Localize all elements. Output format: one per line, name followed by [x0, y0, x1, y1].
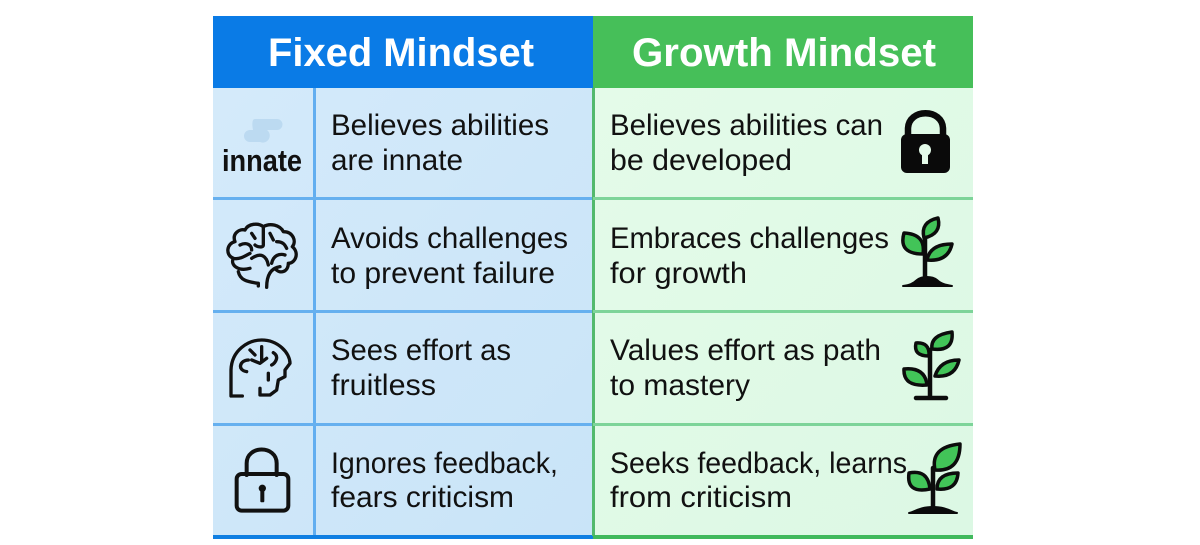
icon: head with brain	[231, 340, 290, 396]
text: avoids challenges: to prevent failure	[331, 257, 555, 290]
text: values effort	[610, 334, 881, 402]
text: seeks feedback: Seeks feedback, learns	[610, 447, 907, 480]
panel: growth mindset column	[592, 88, 973, 539]
icon: innate label: innate	[222, 143, 302, 178]
text: ignores feedback	[331, 447, 558, 514]
text: embraces challenges: for growth	[610, 257, 747, 290]
text: believes abilities are innate: Believes abilities	[331, 109, 549, 142]
icon: solid lock	[901, 113, 950, 173]
icon: sprout with soil	[903, 218, 952, 286]
icon: brain	[228, 224, 296, 287]
text: ignores feedback: Ignores feedback,	[331, 447, 558, 480]
text: values effort: Values effort as path	[610, 334, 881, 367]
text: avoids challenges: Avoids challenges	[331, 222, 568, 255]
text: believes abilities can be developed	[610, 109, 883, 177]
text: seeks feedback: from criticism	[610, 481, 792, 514]
heading: fixed mindset	[213, 16, 593, 88]
text: believes abilities can be developed: Believes abilities can	[610, 109, 883, 142]
text: ignores feedback: fears criticism	[331, 481, 514, 514]
icon: innate label	[222, 119, 302, 178]
text: seeks feedback	[610, 447, 907, 514]
text: values effort: to mastery	[610, 369, 750, 402]
heading: growth mindset	[593, 16, 973, 88]
text: believes abilities can be developed: be developed	[610, 144, 792, 177]
text: sees effort as fruitless	[331, 334, 511, 402]
text: sees effort as fruitless: fruitless	[331, 369, 436, 402]
icon: large leaf plant	[909, 444, 960, 513]
text: believes abilities are innate: are innate	[331, 144, 463, 177]
icon: outline lock	[237, 450, 288, 511]
text: sees effort as fruitless: Sees effort as	[331, 334, 511, 367]
icon: plant with leaves	[904, 332, 959, 398]
text: embraces challenges: Embraces challenges	[610, 222, 889, 255]
panel: fixed mindset column	[213, 88, 593, 539]
text: embraces challenges	[610, 222, 889, 290]
text: believes abilities are innate	[331, 109, 549, 177]
heading: fixed mindset: Fixed Mindset	[268, 31, 534, 75]
text: avoids challenges	[331, 222, 568, 290]
heading: growth mindset: Growth Mindset	[632, 31, 936, 75]
